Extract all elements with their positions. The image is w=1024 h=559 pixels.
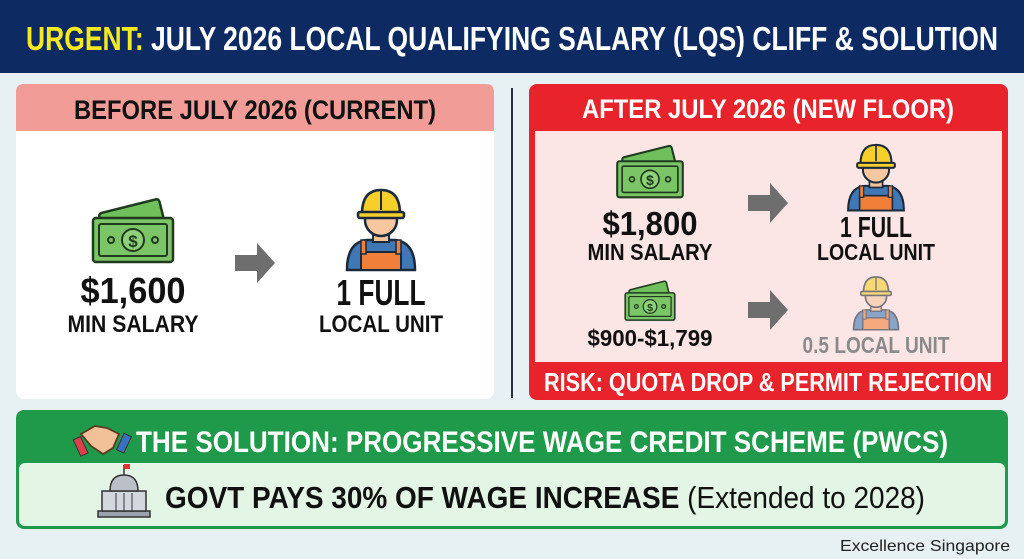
icon: money (617, 145, 683, 197)
unit text: 1 FULL (840, 212, 912, 244)
salary text: $1,800 (602, 205, 698, 242)
before heading: BEFORE JULY 2026 (CURRENT) (74, 95, 436, 125)
after heading: AFTER JULY 2026 (NEW FLOOR) (582, 94, 954, 124)
salary text (68, 270, 198, 338)
panel: solution (16, 410, 1008, 529)
icon: money (93, 199, 173, 262)
icon: half worker (854, 277, 898, 330)
arrow (748, 183, 788, 223)
unit text: LOCAL UNIT (817, 239, 935, 265)
range text: $900-$1,799 (588, 325, 712, 351)
header bar (0, 0, 1024, 73)
icon: small money (625, 281, 675, 320)
salary text: $1,600 (80, 270, 186, 311)
icon: worker (848, 145, 904, 210)
solution text: GOVT PAYS 30% OF WAGE INCREASE (Extended to 2028) (165, 480, 925, 515)
panel: before (16, 84, 494, 399)
arrow (235, 243, 275, 283)
salary text: MIN SALARY (68, 311, 198, 338)
unit text: LOCAL UNIT (319, 311, 443, 338)
icon: worker (347, 190, 415, 270)
arrow (748, 290, 788, 330)
footer credit: Excellence Singapore (840, 538, 1010, 555)
salary text: MIN SALARY (588, 239, 712, 265)
half unit text: 0.5 LOCAL UNIT (802, 332, 950, 358)
unit text: 1 FULL (336, 272, 426, 313)
unit text (817, 212, 935, 265)
icon: government building (98, 464, 150, 517)
salary text (588, 205, 712, 265)
icon: handshake (73, 426, 131, 456)
unit text (319, 272, 443, 338)
panel: after (529, 84, 1008, 400)
